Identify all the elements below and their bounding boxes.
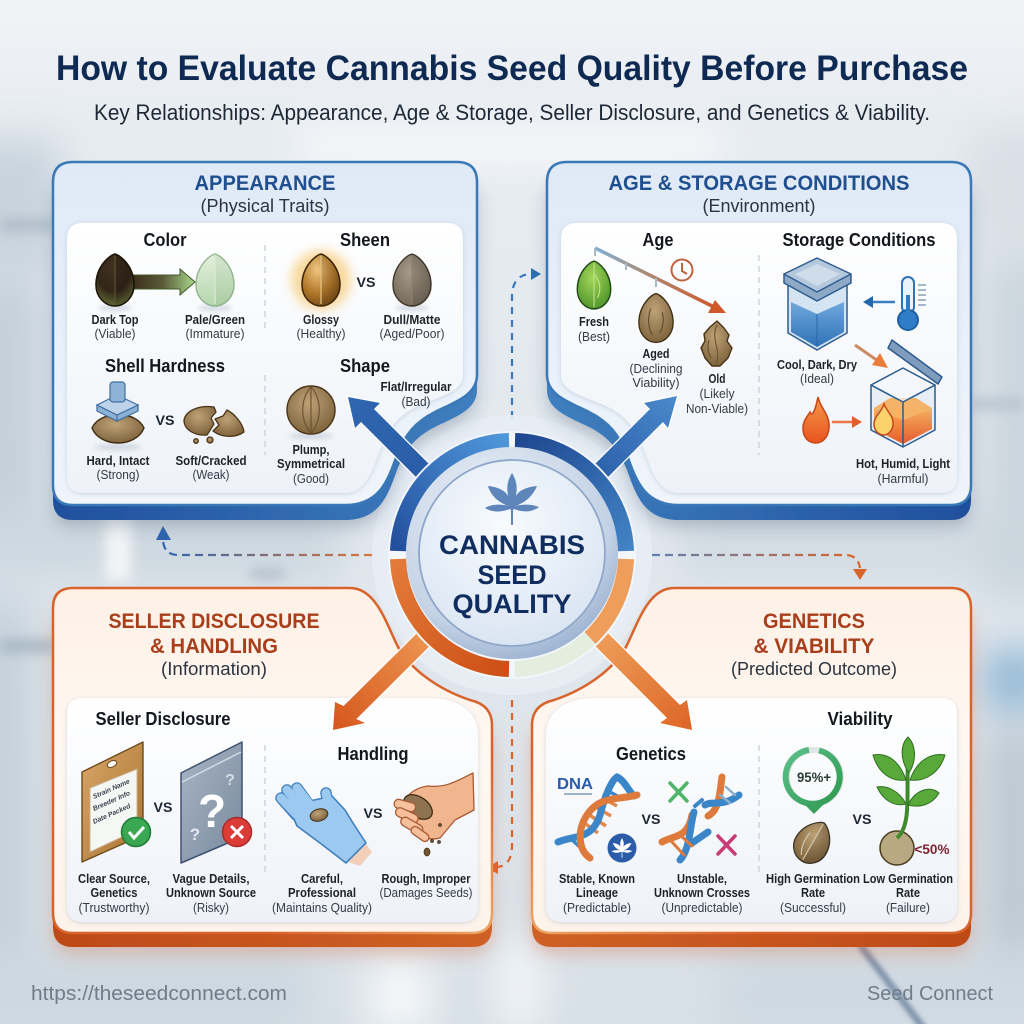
- icon: vague foil pouch with cross: ?: [190, 825, 200, 844]
- heading: genetics and viability: [754, 610, 874, 658]
- label: high germination rate: High Germination: [766, 872, 860, 886]
- label: pale green: (Immature): [186, 327, 244, 341]
- label: dark top: Dark Top: [92, 313, 139, 327]
- label: hard intact: (Strong): [96, 468, 140, 482]
- icon: old seed: [701, 321, 732, 366]
- label: low germination rate: [863, 872, 953, 915]
- label: stable known lineage: (Predictable): [563, 901, 631, 915]
- ring segment: pale green: [515, 638, 590, 669]
- icon: flame: [803, 397, 829, 443]
- label: unstable unknown crosses: (Unpredictable): [662, 901, 742, 915]
- heading: storage conditions: Storage Conditions: [782, 230, 936, 250]
- heading: shape: Shape: [340, 356, 390, 376]
- panel: genetics and viability: [532, 588, 971, 947]
- label: pale green: Pale/Green: [185, 313, 245, 327]
- label: glossy: (Healthy): [296, 327, 346, 341]
- label: cool dark dry: (Ideal): [800, 372, 834, 386]
- icon: cannabis leaf: [485, 473, 539, 525]
- heading: genetics: Genetics: [616, 744, 686, 764]
- label: clear source: Genetics: [90, 886, 138, 900]
- icon: vague foil pouch with cross: ?: [225, 772, 235, 789]
- center title: QUALITY: [452, 589, 572, 619]
- label: low germination rate: (Failure): [886, 901, 930, 915]
- label: stable known lineage: [559, 872, 635, 915]
- label: old: [686, 372, 748, 416]
- subheading: environment: (Environment): [702, 196, 816, 216]
- label: clear source: [78, 872, 150, 915]
- label: old: Old: [708, 372, 726, 386]
- icon: flame in jar: [874, 404, 893, 435]
- icon: gloved hand holding seed: [281, 788, 372, 866]
- center halo disc: [372, 415, 652, 695]
- label: unstable unknown crosses: Unknown Crosses: [654, 886, 750, 900]
- heading: handling: Handling: [338, 744, 408, 764]
- label: dark top: (Viable): [94, 327, 136, 341]
- arrow: center to genetics: [591, 629, 692, 730]
- heading: seller disclosure and handling: & HANDLING: [150, 635, 278, 658]
- label: dull matte: (Aged/Poor): [380, 327, 444, 341]
- ring segment: orange left: [398, 559, 509, 669]
- icon: dull seed: [393, 254, 431, 306]
- center hub: [388, 431, 636, 679]
- label: careful professional: (Maintains Quality): [272, 901, 372, 915]
- heading: age: Age: [642, 230, 674, 250]
- panel: seller disclosure and handling: [53, 588, 492, 947]
- icon: broken DNA helix: [662, 777, 739, 860]
- label: less than 50 percent: <50%: [914, 841, 950, 857]
- ring segment: orange right: [590, 559, 626, 638]
- label: stable known lineage: Stable, Known: [559, 872, 635, 886]
- label: pale green: [185, 313, 245, 341]
- label: dull matte: Dull/Matte: [384, 313, 441, 327]
- label: fresh: [578, 315, 610, 344]
- vs: VS: [364, 805, 382, 821]
- icon: 95 percent germination ring: 95%+: [797, 769, 831, 785]
- label: careful professional: Professional: [288, 886, 356, 900]
- heading: shell hardness: Shell Hardness: [105, 356, 225, 376]
- dashed connector: center to genetics: [652, 555, 867, 580]
- icon: dark seed: [96, 254, 134, 306]
- icon: cracked seed: [184, 407, 244, 443]
- icon: vague foil pouch with cross: [181, 742, 252, 863]
- label: vague details: Vague Details,: [172, 872, 250, 886]
- label: cool dark dry: Cool, Dark, Dry: [777, 358, 857, 372]
- heading: color: Color: [144, 230, 186, 250]
- footer brand: Seed Connect: [867, 983, 993, 1005]
- heading: seller disclosure and handling: SELLER DISCLOSURE: [108, 610, 320, 633]
- vs: VS: [356, 274, 376, 290]
- label: flat irregular: (Bad): [402, 395, 430, 409]
- panel: age and storage: [547, 162, 971, 520]
- heading: seller disclosure: Seller Disclosure: [96, 709, 230, 729]
- vs: VS: [156, 412, 174, 428]
- icon: aged seed: [639, 294, 673, 342]
- label: dull matte: [380, 313, 444, 341]
- label: high germination rate: Rate: [801, 886, 825, 900]
- label: old: (Likely: [700, 387, 735, 401]
- icon: pale seed: [196, 254, 234, 306]
- label: hard intact: [86, 454, 150, 482]
- label: soft cracked: [176, 454, 246, 482]
- arrow: center to seller disclosure: [333, 629, 434, 730]
- icon: cool arrow: [863, 296, 895, 308]
- arrow: center to appearance: [348, 397, 434, 482]
- center title: SEED: [478, 560, 546, 590]
- center title: [439, 530, 585, 619]
- label: plump symmetrical: Symmetrical: [277, 457, 345, 471]
- label: clear source: Clear Source,: [78, 872, 150, 886]
- hub plate: [406, 447, 618, 659]
- vs: VS: [852, 811, 872, 827]
- icon: press on hard seed: [92, 382, 144, 443]
- label: unstable unknown crosses: Unstable,: [677, 872, 727, 886]
- dashed connector: center to appearance: [156, 526, 372, 555]
- label: fresh: (Best): [578, 330, 610, 344]
- label: soft cracked: (Weak): [192, 468, 230, 482]
- label: plump symmetrical: (Good): [293, 472, 329, 486]
- label: aged: [630, 347, 683, 390]
- icon: seedling from seed: [873, 737, 945, 865]
- center title: CANNABIS: [439, 530, 585, 560]
- subtitle: Key Relationships: Appearance, Age & Storage, Seller Disclosure, and Genetics & Viability.: [94, 100, 930, 125]
- icon: plump seed: [287, 386, 335, 434]
- label: aged: Viability): [632, 376, 680, 390]
- icon: rough hand crushing seed: [393, 773, 474, 856]
- icon: clock: [672, 260, 692, 280]
- ring segment: blue right: [515, 441, 626, 551]
- label: flat irregular: Flat/Irregular: [380, 380, 452, 394]
- label: soft cracked: Soft/Cracked: [176, 454, 246, 468]
- title: How to Evaluate Cannabis Seed Quality Before Purchase: [56, 49, 968, 88]
- label: old: Non-Viable): [686, 402, 748, 416]
- heading: age and storage: AGE & STORAGE CONDITIONS: [608, 172, 910, 195]
- icon: cannabis leaf badge: [608, 834, 636, 862]
- label: stable known lineage: Lineage: [576, 886, 618, 900]
- heading: genetics and viability: & VIABILITY: [754, 635, 874, 658]
- icon: glossy seed: [291, 250, 351, 310]
- hub disc: [419, 460, 605, 646]
- heading: seller disclosure and handling: [108, 610, 320, 658]
- label: plump symmetrical: Plump,: [292, 443, 330, 457]
- icon: color change arrow: [130, 269, 195, 295]
- label: low germination rate: Low Germination: [863, 872, 953, 886]
- heading: sheen: Sheen: [340, 230, 390, 250]
- icon: stable DNA helix: [557, 776, 637, 858]
- dashed connector: center to age and storage: [512, 268, 541, 418]
- icon: labelled seed pouch with check: Breeder Info: [92, 790, 131, 813]
- label: flat irregular: [380, 380, 452, 409]
- label: glossy: [296, 313, 346, 341]
- icon: stable DNA helix: DNA: [557, 776, 593, 793]
- label: vague details: (Risky): [193, 901, 229, 915]
- icon: healthy seed: [787, 814, 839, 870]
- label: glossy: Glossy: [303, 313, 339, 327]
- arrow: center to age and storage: [590, 396, 677, 482]
- heading: appearance: APPEARANCE: [194, 172, 336, 195]
- vs: VS: [154, 799, 172, 815]
- heading: genetics and viability: GENETICS: [763, 610, 865, 633]
- label: plump symmetrical: [277, 443, 345, 486]
- dashed connector: center to seller: [487, 700, 512, 874]
- label: rough improper: Rough, Improper: [382, 872, 471, 886]
- icon: 95 percent germination ring: [786, 750, 841, 814]
- icon: labelled seed pouch with check: [82, 742, 150, 862]
- label: rough improper: [380, 872, 472, 900]
- label: unstable unknown crosses: [654, 872, 750, 915]
- subheading: information: (Information): [161, 659, 267, 679]
- label: aged: Aged: [642, 347, 670, 361]
- icon: transition arrow: [855, 345, 888, 368]
- label: hot humid light: [856, 457, 951, 486]
- label: low germination rate: Rate: [896, 886, 920, 900]
- icon: hot storage jar: [871, 340, 942, 447]
- icon: green cross mark: [670, 783, 687, 801]
- footer url: https://theseedconnect.com: [31, 983, 287, 1005]
- subheading: physical traits: (Physical Traits): [200, 196, 330, 216]
- ring segment: blue left: [398, 441, 509, 551]
- label: clear source: (Trustworthy): [78, 901, 150, 915]
- label: high germination rate: (Successful): [780, 901, 846, 915]
- label: hot humid light: (Harmful): [878, 472, 928, 486]
- icon: vague foil pouch with cross: ?: [198, 785, 226, 837]
- label: hard intact: Hard, Intact: [86, 454, 150, 468]
- icon: fresh seed: [577, 261, 611, 309]
- label: aged: (Declining: [630, 362, 683, 376]
- label: vague details: [166, 872, 256, 915]
- icon: thermometer: [898, 277, 926, 330]
- icon: ageing timeline arrow: [595, 248, 726, 313]
- icon: heat arrow: [832, 416, 862, 428]
- icon: cool storage jar: [784, 258, 851, 350]
- label: careful professional: [272, 872, 372, 915]
- label: hot humid light: Hot, Humid, Light: [856, 457, 951, 471]
- label: rough improper: (Damages Seeds): [380, 886, 472, 900]
- vs: VS: [642, 811, 660, 827]
- label: dark top: [92, 313, 139, 341]
- heading: viability: Viability: [828, 709, 892, 729]
- label: cool dark dry: [777, 358, 857, 386]
- subheading: predicted outcome: (Predicted Outcome): [731, 659, 897, 679]
- label: vague details: Unknown Source: [166, 886, 256, 900]
- panel: appearance: [53, 162, 477, 520]
- icon: pink cross mark: [718, 836, 735, 854]
- icon: labelled seed pouch with check: Strain Name: [92, 778, 131, 801]
- label: fresh: Fresh: [579, 315, 609, 329]
- icon: labelled seed pouch with check: Date Packed: [92, 803, 133, 826]
- label: careful professional: Careful,: [301, 872, 343, 886]
- label: high germination rate: [766, 872, 860, 915]
